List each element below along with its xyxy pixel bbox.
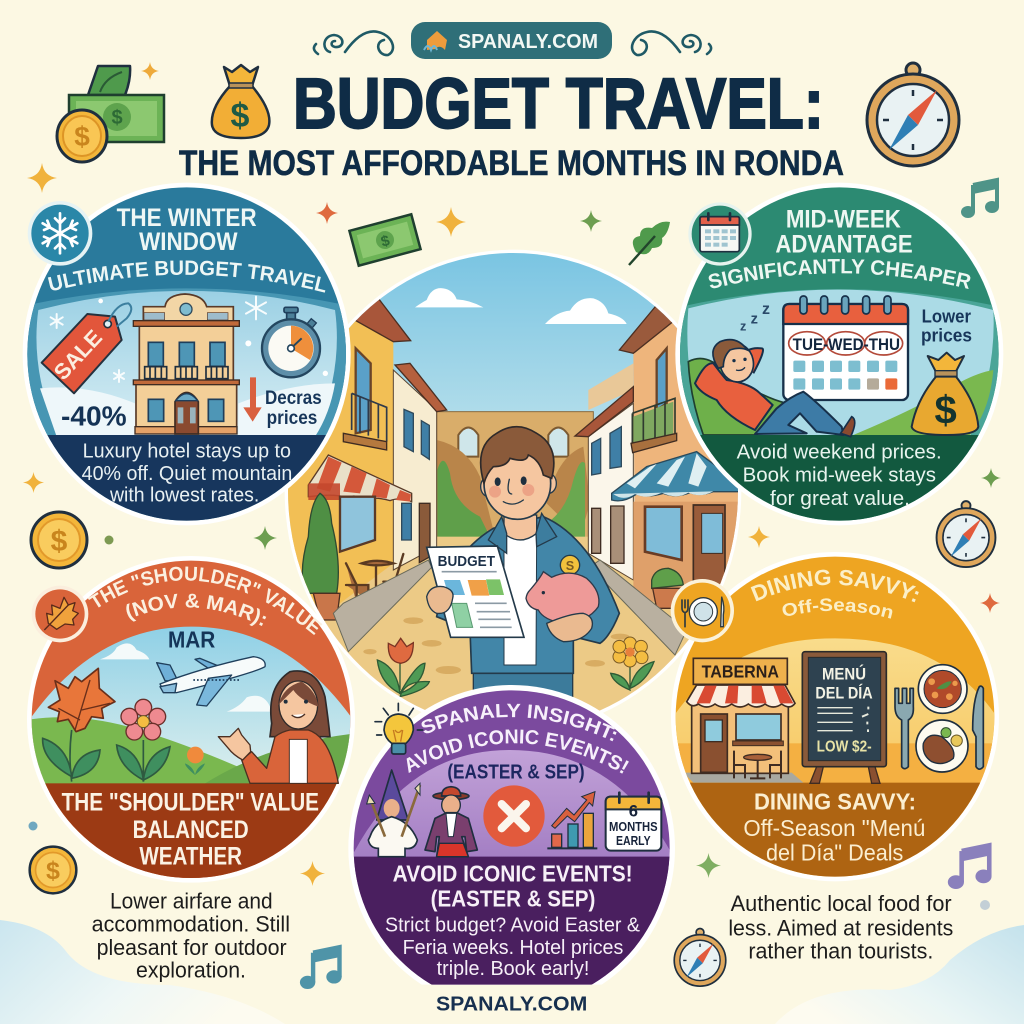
shoulder heading: (NOV & MAR):: [126, 594, 266, 626]
shoulder band text: BALANCED: [133, 817, 249, 844]
icon: coin lower left: [30, 847, 76, 893]
icon: nazareno: [367, 770, 420, 857]
dining band text: [743, 788, 925, 866]
icon: money bag: [212, 65, 269, 138]
dining band text: del Día" Deals: [766, 840, 903, 866]
sparkles: [23, 62, 1001, 910]
woman presenting: [218, 671, 338, 783]
panel: central street scene: BUDGET: [438, 554, 495, 570]
icon: autumn leaf badge: [32, 586, 88, 642]
panel: spanaly insight: [348, 685, 675, 1016]
sidewalks: [333, 560, 432, 652]
icon: money bag: $: [231, 97, 250, 135]
dining description: [728, 891, 953, 964]
dining description: Authentic local food for: [731, 891, 952, 916]
icon: six months calendar: MONTHS: [609, 820, 658, 834]
mid-week description: Book mid-week stays: [743, 464, 936, 487]
icon: leaf: [629, 222, 670, 265]
icon: hotel building: [133, 294, 239, 434]
dining description: rather than tourists.: [748, 939, 933, 964]
shoulder description: Lower airfare and: [110, 888, 273, 913]
icon: plate badge: [671, 579, 734, 642]
dining heading: [750, 570, 919, 619]
icon: flamenco dancer: [425, 787, 477, 857]
icon: banknotes and coin: $: [111, 107, 123, 129]
title: BUDGET TRAVEL:: [293, 65, 824, 144]
icon: music note bottom: [300, 947, 342, 989]
header logo pill: SPANALY.COM: [458, 31, 598, 53]
winter heading: [48, 204, 326, 293]
zzz: z: [751, 311, 758, 327]
icon: down arrow: [243, 377, 262, 422]
icon: pink flower: [117, 699, 205, 782]
cloud: bottom left: [0, 920, 285, 1024]
winter description: [82, 439, 292, 507]
icon: coin left: [31, 512, 87, 568]
left buildings: [280, 320, 393, 617]
icon: compass right: [937, 501, 995, 567]
menu board: MENÚ: [822, 664, 866, 683]
icon: small banknote: [349, 214, 421, 266]
lower prices label: Lower: [922, 306, 971, 327]
panel: dining savvy: [670, 552, 999, 964]
dining description: less. Aimed at residents: [728, 915, 953, 940]
icon: money bag: [912, 353, 978, 435]
panel: the winter window: [22, 182, 351, 526]
menu board: DEL DÍA: [815, 683, 873, 702]
menu board: [802, 652, 886, 783]
icon: light bulb: [375, 703, 423, 754]
insight band text: triple. Book early!: [437, 957, 589, 980]
shoulder description: [92, 888, 290, 983]
taberna shop: TABERNA: [702, 662, 779, 682]
icon: money bag: $: [935, 388, 957, 432]
taberna shop: [687, 658, 795, 778]
icon: compass: [867, 63, 959, 166]
mid-week heading: MID-WEEK: [786, 205, 901, 233]
mid-week description: Avoid weekend prices.: [737, 440, 942, 463]
decorative swirl left: [314, 31, 393, 55]
month label: MAR: [168, 626, 215, 652]
dining band text: DINING SAVVY:: [754, 788, 916, 814]
shoulder band text: THE "SHOULDER" VALUE: [62, 790, 319, 817]
icon: compass bottom: [674, 928, 726, 986]
shoulder description: exploration.: [136, 958, 246, 983]
cutlery and dishes: [895, 665, 983, 772]
lower prices label: prices: [921, 325, 972, 346]
shoulder description: pleasant for outdoor: [97, 935, 287, 960]
footer site name: SPANALY.COM: [436, 993, 587, 1016]
winter description: with lowest rates.: [109, 484, 259, 507]
decreasing prices label: prices: [267, 408, 317, 429]
budget sheet: [427, 546, 524, 637]
icon: rising price chart: [547, 792, 597, 848]
icon: small banknote: $: [379, 232, 392, 251]
winter heading: WINDOW: [139, 228, 238, 256]
mid-week heading: ADVANTAGE: [775, 231, 913, 259]
subtitle: THE MOST AFFORDABLE MONTHS IN RONDA: [179, 144, 844, 183]
insight band text: Strict budget? Avoid Easter &: [385, 914, 640, 937]
icon: banknotes and coin: $: [74, 121, 90, 152]
dining band text: Off-Season "Menú: [743, 815, 925, 841]
icon: calendar badge: [688, 202, 752, 266]
icon: maple leaf: [43, 668, 115, 782]
decreasing prices label: [265, 388, 322, 429]
header logo pill: [411, 22, 612, 59]
dining heading: DINING SAVVY:: [750, 570, 919, 602]
icon: no symbol: [483, 785, 545, 847]
mid-week description: for great value.: [770, 487, 910, 510]
shoulder band text: WEATHER: [139, 843, 242, 870]
insight heading: SPANALY INSIGHT:: [422, 704, 617, 742]
mid-week description: [737, 440, 942, 510]
left awning: [308, 455, 412, 502]
insight heading: [406, 704, 629, 774]
icon: sale tag: [42, 303, 131, 393]
insight band text: (EASTER & SEP): [431, 886, 595, 912]
flowers: [377, 660, 429, 697]
calendar illustration: [783, 296, 908, 400]
zzz: [740, 301, 770, 334]
zzz: z: [740, 320, 746, 334]
icon: sale tag: SALE: [49, 325, 107, 385]
icon: stopwatch: [262, 307, 320, 377]
cloud: bottom right: [775, 925, 1024, 1024]
resting traveller: [695, 340, 855, 437]
discount label: -40%: [61, 401, 127, 432]
mid-week heading: [708, 205, 970, 289]
icon: music note purple: [948, 845, 992, 889]
snowflakes: [51, 297, 328, 382]
panel: central street scene: [280, 250, 747, 737]
panel: mid-week advantage: [675, 182, 1004, 526]
lower prices label: [921, 306, 972, 346]
icon: six months calendar: [606, 793, 661, 851]
dining heading: Off-Season: [782, 598, 892, 619]
easter label: (EASTER & SEP): [447, 760, 585, 783]
insight heading: AVOID ICONIC EVENTS!: [406, 730, 629, 774]
winter heading: ULTIMATE BUDGET TRAVEL: [48, 260, 326, 293]
winter heading: THE WINTER: [117, 204, 257, 232]
icon: airplane: [157, 657, 265, 706]
icon: music note teal: [961, 180, 999, 218]
person: [472, 674, 574, 698]
icon: six months calendar: 6: [629, 802, 638, 821]
shoulder description: accommodation. Still: [92, 912, 290, 937]
insight band text: Feria weeks. Hotel prices: [403, 936, 623, 959]
decorative swirl right: [632, 31, 711, 55]
piggy bank: [560, 555, 580, 575]
mid-week heading: SIGNIFICANTLY CHEAPER: [708, 259, 970, 289]
menu board: LOW $2-: [817, 739, 872, 756]
panel: shoulder value: [27, 556, 355, 983]
right buildings: [633, 317, 738, 584]
winter description: Luxury hotel stays up to: [83, 439, 291, 462]
decreasing prices label: Decras: [265, 388, 322, 409]
icon: six months calendar: EARLY: [616, 834, 651, 848]
winter description: 40% off. Quiet mountain: [82, 462, 292, 485]
shoulder band text: [62, 790, 319, 870]
shoulder heading: THE "SHOULDER" VALUE: [88, 566, 322, 635]
zzz: z: [762, 301, 770, 318]
icon: snowflake badge: [28, 201, 92, 266]
insight band text: [385, 861, 640, 980]
panel: central street scene: S: [566, 559, 574, 573]
right awning: [612, 452, 740, 501]
calendar illustration: TUE-WED-THU: [793, 335, 900, 354]
insight band text: AVOID ICONIC EVENTS!: [393, 861, 633, 887]
icon: banknotes and coin: [57, 66, 164, 162]
